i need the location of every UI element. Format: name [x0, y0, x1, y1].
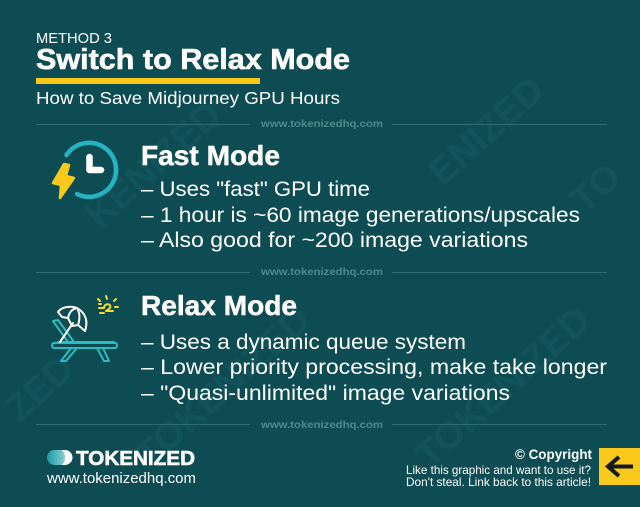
infographic canvas: KENIZED	[78, 94, 230, 237]
relax mode bullet 3: – "Quasi-unlimited" image variations	[141, 382, 510, 405]
copyright heading: © Copyright	[515, 447, 592, 462]
subtitle: How to Save Midjourney GPU Hours	[36, 88, 340, 108]
infographic canvas: TOKENIZED	[128, 299, 319, 477]
footer logo	[46, 447, 196, 487]
title: Switch to Relax Mode	[36, 44, 350, 76]
eyebrow: method 3: METHOD 3	[36, 30, 112, 47]
logo mark	[47, 450, 72, 465]
copyright line 1: Like this graphic and want to use it?	[406, 463, 591, 477]
website label 2: www.tokenizedhq.com	[260, 266, 383, 278]
fast mode bullet 2: – 1 hour is ~60 image generations/upscales	[141, 204, 580, 227]
copyright line 2: Don't steal. Link back to this article!	[406, 475, 591, 489]
infographic canvas: TO	[563, 156, 630, 222]
infographic canvas: ENIZED	[421, 69, 553, 194]
icon: yellow arrow badge	[599, 448, 640, 485]
logo website: www.tokenizedhq.com	[46, 470, 196, 487]
infographic canvas: TOKENIZED	[408, 299, 599, 477]
panel: relax mode	[141, 290, 607, 405]
logo wordmark: TOKENIZED	[76, 447, 195, 470]
lounger	[52, 320, 117, 361]
sun	[98, 296, 118, 313]
relax mode bullet 2: – Lower priority processing, make take longer	[141, 356, 607, 379]
umbrella	[58, 307, 86, 342]
header block	[36, 30, 350, 108]
heading: relax mode: Relax Mode	[141, 290, 297, 321]
icon: sun lounger with umbrella and sun	[52, 296, 118, 361]
title underline	[36, 78, 260, 84]
website label 3: www.tokenizedhq.com	[260, 419, 383, 431]
fast mode bullet 3: – Also good for ~200 image variations	[141, 229, 528, 252]
infographic canvas: ZED	[0, 348, 83, 430]
relax mode bullet 1: – Uses a dynamic queue system	[141, 331, 466, 354]
icon: fast mode clock with lightning bolt	[53, 143, 116, 198]
fast mode bullet 1: – Uses "fast" GPU time	[141, 178, 370, 201]
website label 1: www.tokenizedhq.com	[260, 118, 383, 130]
copyright note	[406, 447, 592, 489]
heading: fast mode: Fast Mode	[141, 140, 280, 171]
panel: fast mode	[141, 140, 580, 252]
